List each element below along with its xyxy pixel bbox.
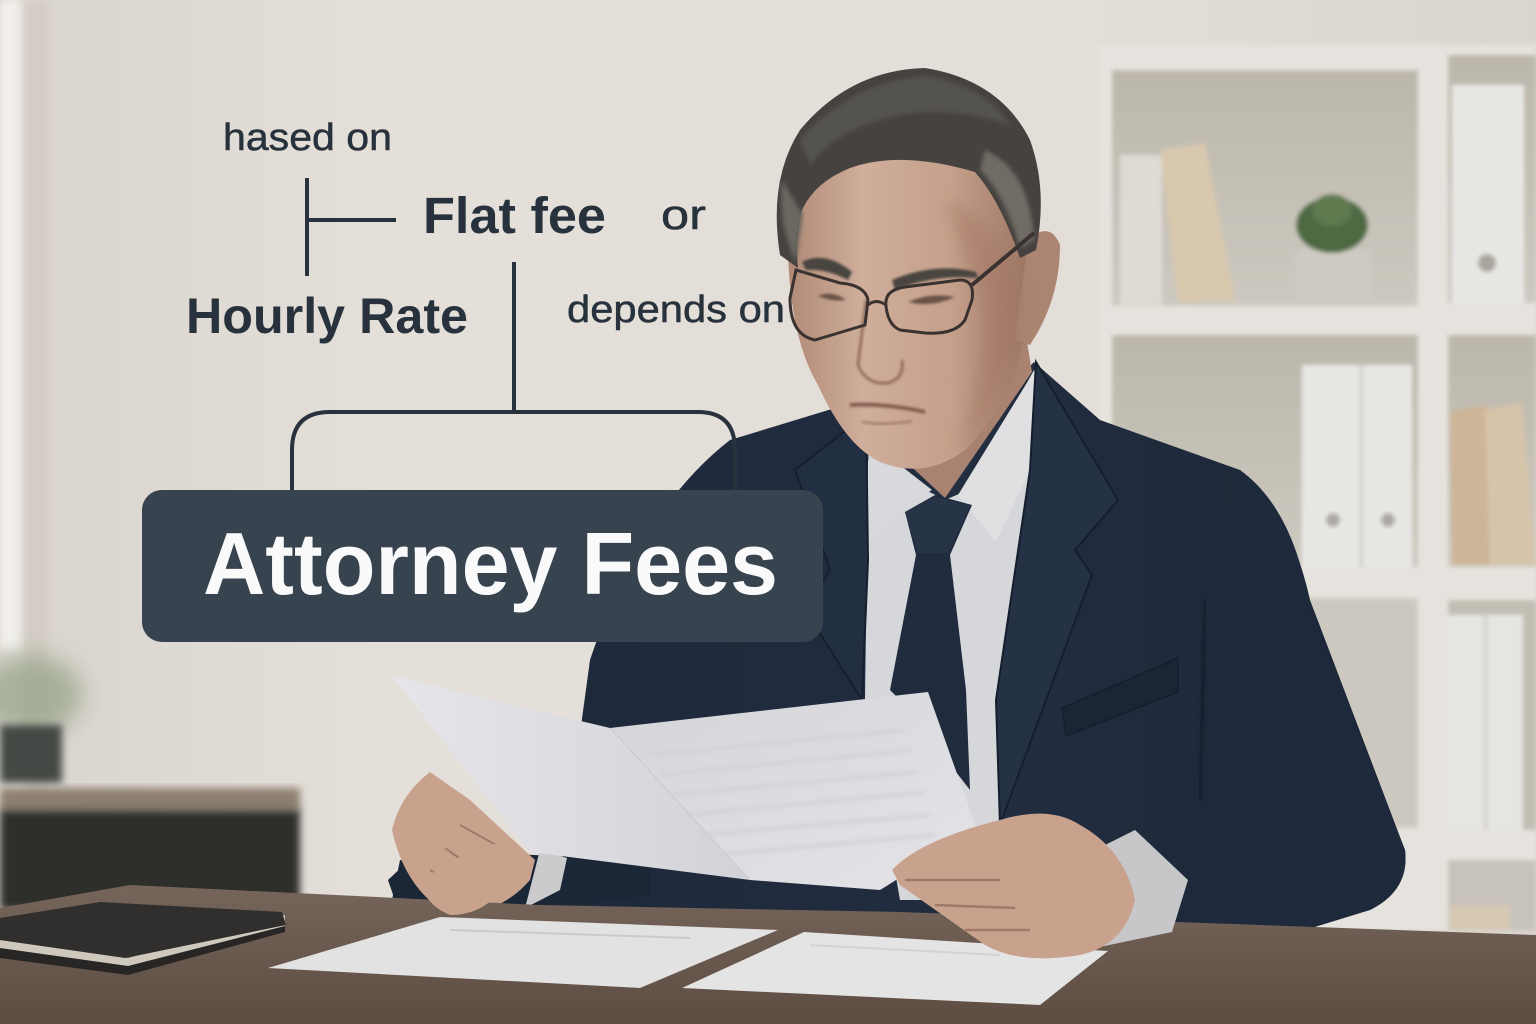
shirt [865,370,1036,900]
eyebrows [802,258,852,280]
left thumb [420,844,524,915]
shading on face [945,200,1022,452]
head [788,110,1040,469]
man [388,68,1406,952]
connector lines: hourly rate and flat fee [307,178,396,276]
blurred plant and side table [0,655,300,910]
left cuff [525,850,567,908]
books [1120,155,1162,305]
nose [858,300,902,383]
papers held [392,676,977,890]
tie [890,495,972,790]
left hand [392,772,535,915]
label: or: or [661,191,706,238]
neck [872,330,1032,498]
label: depends on: depends on [567,289,785,331]
bookshelf [1098,45,1536,930]
collar [868,440,932,540]
plant [1296,250,1370,302]
eyes [818,294,846,300]
banner: Attorney Fees: Attorney Fees [203,514,778,613]
banner: Attorney Fees [142,490,823,642]
label: based on: hased on [223,117,392,159]
lapels [795,415,868,700]
ear [1015,231,1060,345]
glasses [790,233,1034,340]
label: Flat fee: Flat fee [423,187,606,244]
connector: bracket above Attorney Fees [292,262,735,490]
mouth [850,405,925,412]
suit body [390,362,1406,950]
notebook [0,902,286,975]
left sleeve [388,850,650,915]
sleeve shadows [1120,470,1406,952]
hair [777,68,1041,268]
pocket [1062,658,1178,736]
label: Hourly Rate: Hourly Rate [186,288,468,344]
desk [0,885,1536,1024]
papers on desk [268,917,1108,1005]
right hand [892,814,1188,958]
